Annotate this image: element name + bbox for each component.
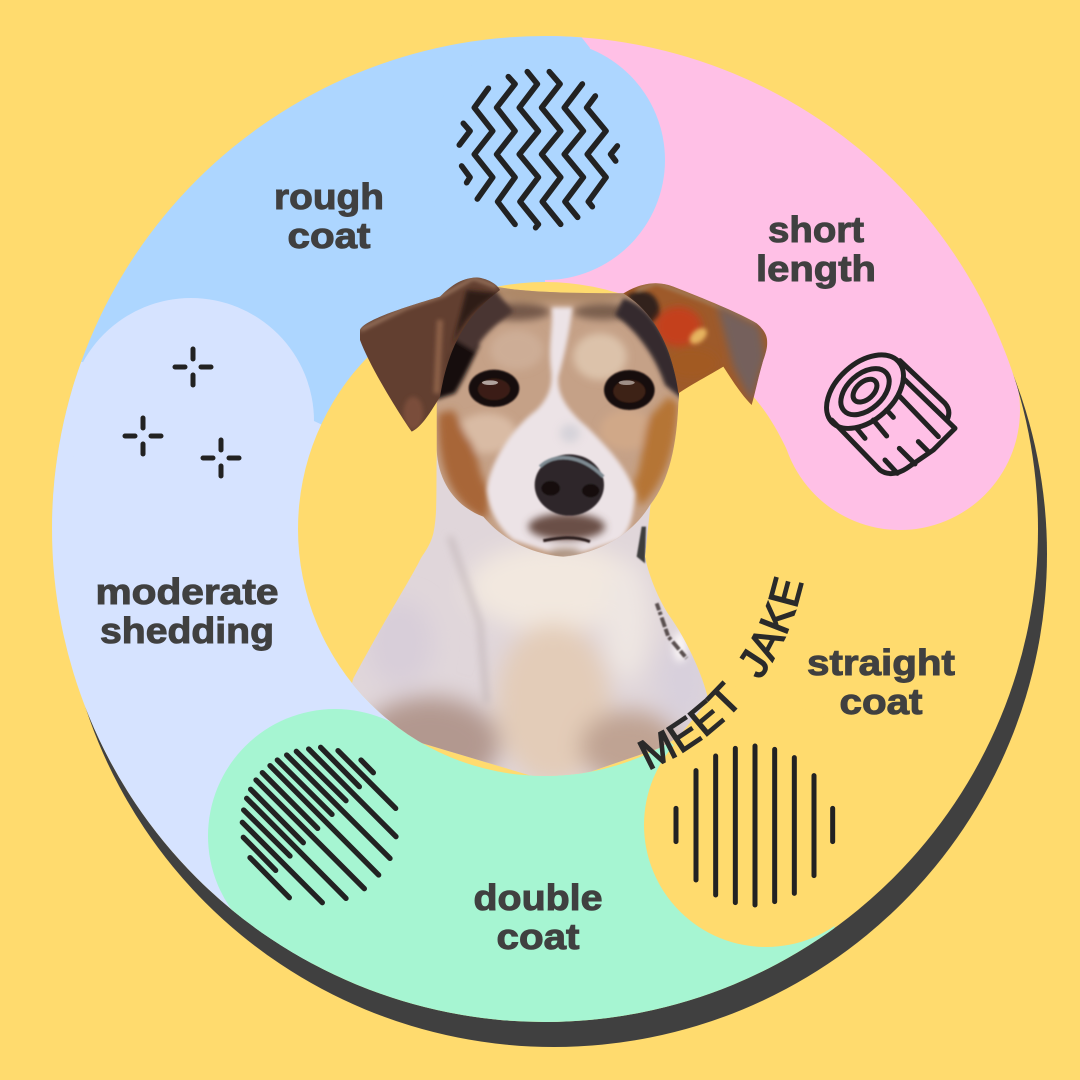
label: straight coat: straight bbox=[807, 642, 955, 683]
label: straight coat: coat bbox=[840, 681, 923, 722]
inner yellow circle bbox=[298, 282, 792, 776]
icon: sparkles bbox=[125, 349, 239, 476]
eyes and nose bbox=[469, 370, 655, 542]
panel: rough coat bbox=[52, 36, 665, 527]
label: moderate shedding: moderate bbox=[96, 571, 278, 612]
right ear bbox=[624, 283, 768, 405]
dog photo: Jake bbox=[340, 273, 773, 790]
panel: double coat bbox=[208, 709, 835, 1022]
label: short length: length bbox=[756, 248, 876, 289]
title: MEET JAKE: MEET JAKE bbox=[637, 576, 804, 770]
label: moderate shedding: shedding bbox=[100, 610, 274, 651]
icon: measuring tape log bbox=[813, 340, 955, 474]
label: double coat: double bbox=[474, 877, 602, 918]
panel: moderate shedding bbox=[52, 298, 392, 964]
icon: vertical lines bbox=[676, 746, 833, 905]
left ear bbox=[360, 277, 500, 432]
label: rough coat: rough bbox=[274, 176, 384, 217]
icon: wavy lines bbox=[459, 72, 617, 228]
label: rough coat: coat bbox=[288, 215, 371, 256]
panel: straight coat bbox=[644, 642, 955, 947]
label: short length: short bbox=[768, 209, 864, 250]
dog body bbox=[352, 448, 708, 776]
label: double coat: coat bbox=[496, 916, 580, 957]
panel: short length bbox=[545, 36, 1020, 530]
dog head bbox=[423, 280, 690, 563]
icon: diagonal lines bbox=[242, 747, 396, 903]
